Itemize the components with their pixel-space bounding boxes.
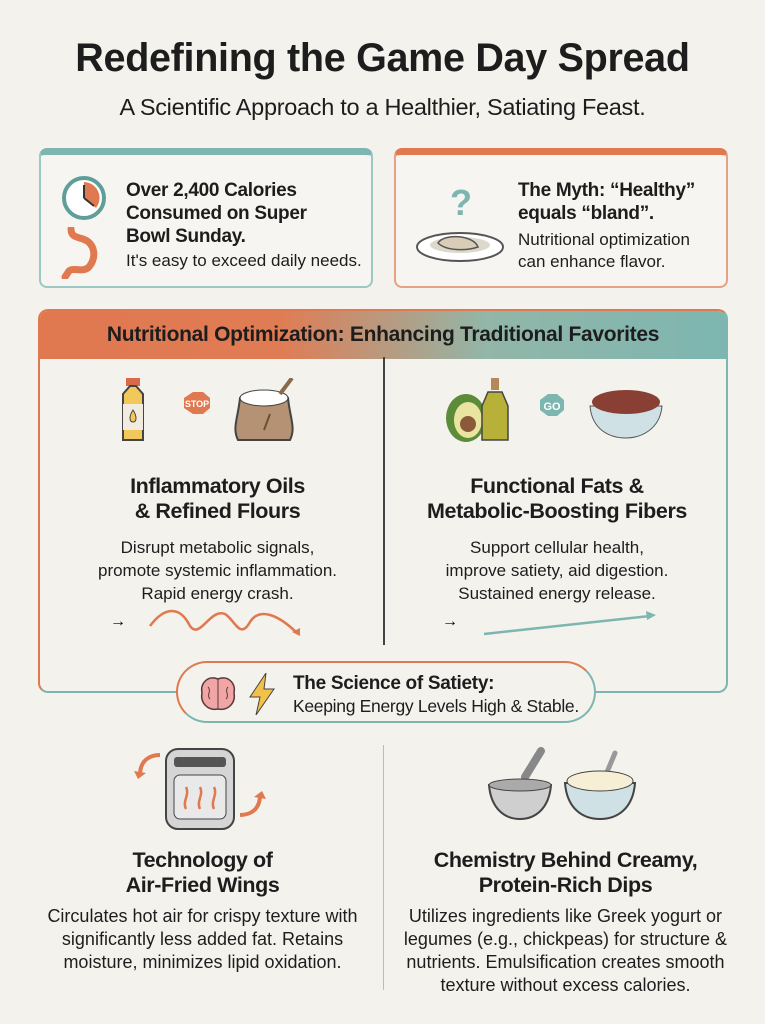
panel: nutritional optimization (38, 309, 728, 693)
text: Circulates hot air for crispy texture with (47, 906, 358, 926)
text: promote systemic inflammation. (98, 561, 337, 580)
column: inflammatory (98, 378, 337, 636)
text (98, 538, 337, 603)
callout: science of satiety (176, 661, 596, 723)
heading (130, 474, 305, 523)
section: creamy dips (404, 747, 727, 995)
icon: lightning (249, 673, 275, 715)
arrow: sustained (442, 611, 656, 636)
heading (126, 848, 279, 897)
header band: Nutritional Optimization: Enhancing Traditional Favorites (107, 323, 659, 346)
icon: stomach (62, 227, 98, 279)
text: Keeping Energy Levels High & Stable. (293, 696, 579, 716)
heading: equals “bland”. (518, 203, 654, 224)
text (518, 230, 690, 271)
icons: oil, stop, flour: STOP (185, 399, 209, 409)
heading: Bowl Sunday. (126, 226, 246, 247)
card: myth (394, 148, 728, 288)
card: calories (39, 148, 373, 288)
text: Rapid energy crash. (141, 584, 294, 603)
heading: Protein-Rich Dips (479, 873, 652, 897)
heading: Functional Fats & (470, 474, 644, 498)
title: Redefining the Game Day Spread (75, 36, 690, 80)
text: improve satiety, aid digestion. (446, 561, 668, 580)
heading: Inflammatory Oils (130, 474, 305, 498)
icons: oil, stop, flour (122, 378, 294, 441)
heading: The Science of Satiety: (293, 673, 494, 694)
text: significantly less added fat. Retains (62, 929, 343, 949)
text (446, 538, 668, 603)
heading: Air-Fried Wings (126, 873, 279, 897)
column: functional fats (427, 378, 687, 636)
text (404, 906, 727, 995)
text: Disrupt metabolic signals, (121, 538, 314, 557)
subtitle: A Scientific Approach to a Healthier, Satiating Feast. (120, 94, 645, 120)
icon: question plate: ? (450, 182, 472, 223)
heading (434, 848, 697, 897)
text: moisture, minimizes lipid oxidation. (63, 952, 342, 972)
text: nutrients. Emulsification creates smooth (406, 952, 725, 972)
icon: question plate (416, 182, 504, 262)
header band (40, 311, 726, 359)
arrow: sustained: → (442, 613, 458, 630)
icons: avocado oil go beans (446, 378, 662, 442)
section: air-fried wings (47, 748, 358, 972)
text: texture without excess calories. (440, 975, 691, 995)
icon: brain (200, 677, 236, 710)
heading: Metabolic-Boosting Fibers (427, 499, 687, 523)
heading: The Myth: “Healthy” (518, 180, 695, 201)
heading (518, 180, 695, 224)
heading (126, 180, 307, 247)
heading: Chemistry Behind Creamy, (434, 848, 697, 872)
text: Sustained energy release. (458, 584, 656, 603)
heading: Technology of (132, 848, 273, 872)
text: legumes (e.g., chickpeas) for structure & (404, 929, 727, 949)
text: Support cellular health, (470, 538, 644, 557)
arrow: crash (110, 610, 300, 636)
text: can enhance flavor. (518, 252, 665, 271)
text: Nutritional optimization (518, 230, 690, 249)
icon: air fryer (134, 748, 266, 830)
text: Utilizes ingredients like Greek yogurt or (409, 906, 722, 926)
icons: avocado oil go beans: GO (543, 401, 561, 413)
icon: clock (62, 176, 106, 220)
arrow: crash: → (110, 613, 126, 630)
icon: mortar and yogurt bowl (488, 747, 636, 820)
heading (427, 474, 687, 523)
text (47, 906, 358, 972)
heading: Over 2,400 Calories (126, 180, 297, 201)
text: It's easy to exceed daily needs. (126, 251, 362, 270)
heading: & Refined Flours (135, 499, 300, 523)
heading: Consumed on Super (126, 203, 307, 224)
